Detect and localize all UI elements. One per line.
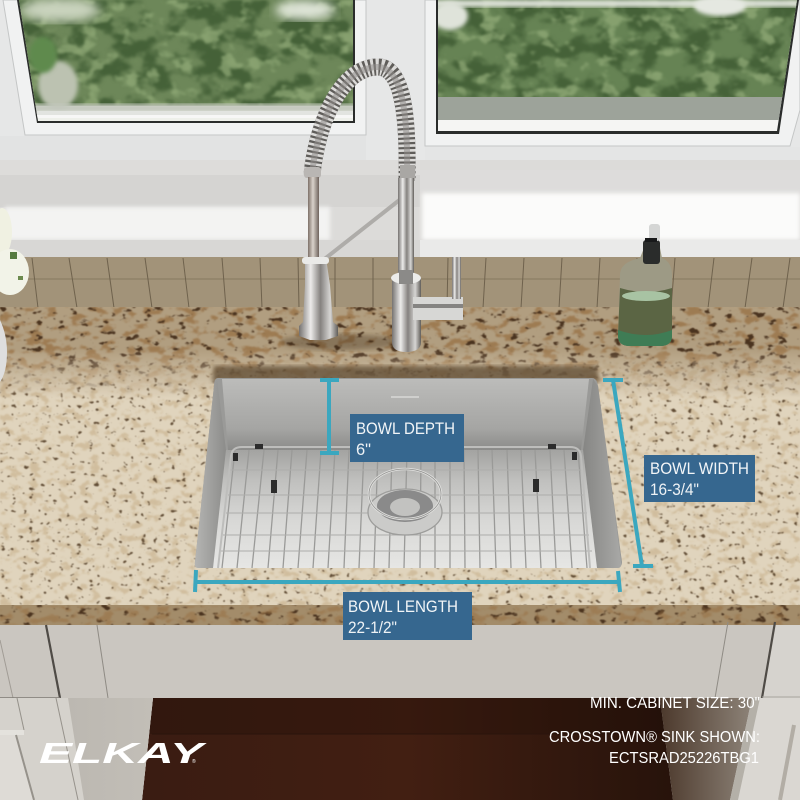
left lower cabinet doors (0, 698, 153, 800)
logo: Elkay: ELKAY (39, 738, 208, 770)
shadow on counter (280, 334, 400, 350)
flowers at left edge (0, 208, 29, 295)
right bowl wall (583, 379, 621, 568)
left stem (308, 177, 319, 259)
bowl floor (213, 450, 597, 568)
text: sink model shown: ECTSRAD25226TBG1 (609, 750, 759, 767)
label: bowl length (343, 592, 472, 640)
arm (322, 198, 402, 261)
right body (392, 277, 421, 352)
label: bowl depth: 6" (356, 441, 371, 459)
text: sink model shown (549, 729, 760, 767)
vase at left edge (0, 320, 7, 382)
bottom grid with drain strainer (218, 444, 592, 568)
label: bowl depth (350, 414, 464, 462)
text: minimum cabinet size: MIN. CABINET SIZE: 30" (590, 695, 760, 712)
lever handle (413, 297, 463, 320)
wood floor under cabinet (142, 698, 752, 800)
label: bowl width (644, 455, 755, 502)
window sill (0, 160, 800, 257)
backsplash tiles (0, 257, 800, 310)
dimension arrow: bowl length (195, 570, 620, 592)
right lower cabinet doors (730, 698, 800, 800)
cabinet face and rails (0, 622, 800, 698)
right window with foliage (430, 0, 800, 134)
drain strainer (368, 469, 442, 535)
label: bowl depth: BOWL DEPTH (356, 420, 455, 438)
undermount sink bowl (195, 366, 622, 568)
text: sink model shown: CROSSTOWN® SINK SHOWN: (549, 729, 760, 746)
dimension arrow: bowl depth (320, 380, 339, 453)
left base (299, 258, 338, 340)
label: bowl width: 16-3/4" (650, 481, 699, 499)
faucet (280, 67, 463, 352)
granite countertop (0, 307, 800, 625)
rack bumpers (233, 444, 577, 493)
right riser (398, 178, 414, 283)
left bowl wall (195, 379, 226, 568)
soap dispenser (618, 224, 672, 346)
back bowl wall (222, 379, 589, 450)
label: bowl width: BOWL WIDTH (650, 460, 749, 478)
front edge (0, 605, 800, 625)
dimension arrow: bowl width (603, 380, 653, 566)
logo: Elkay: ® (192, 758, 196, 765)
wall and window frames (0, 0, 800, 175)
left window with foliage (0, 0, 360, 123)
coil spring (312, 67, 407, 178)
label: bowl length: 22-1/2" (348, 619, 397, 637)
label: bowl length: BOWL LENGTH (348, 598, 458, 616)
logo: Elkay (39, 738, 208, 770)
